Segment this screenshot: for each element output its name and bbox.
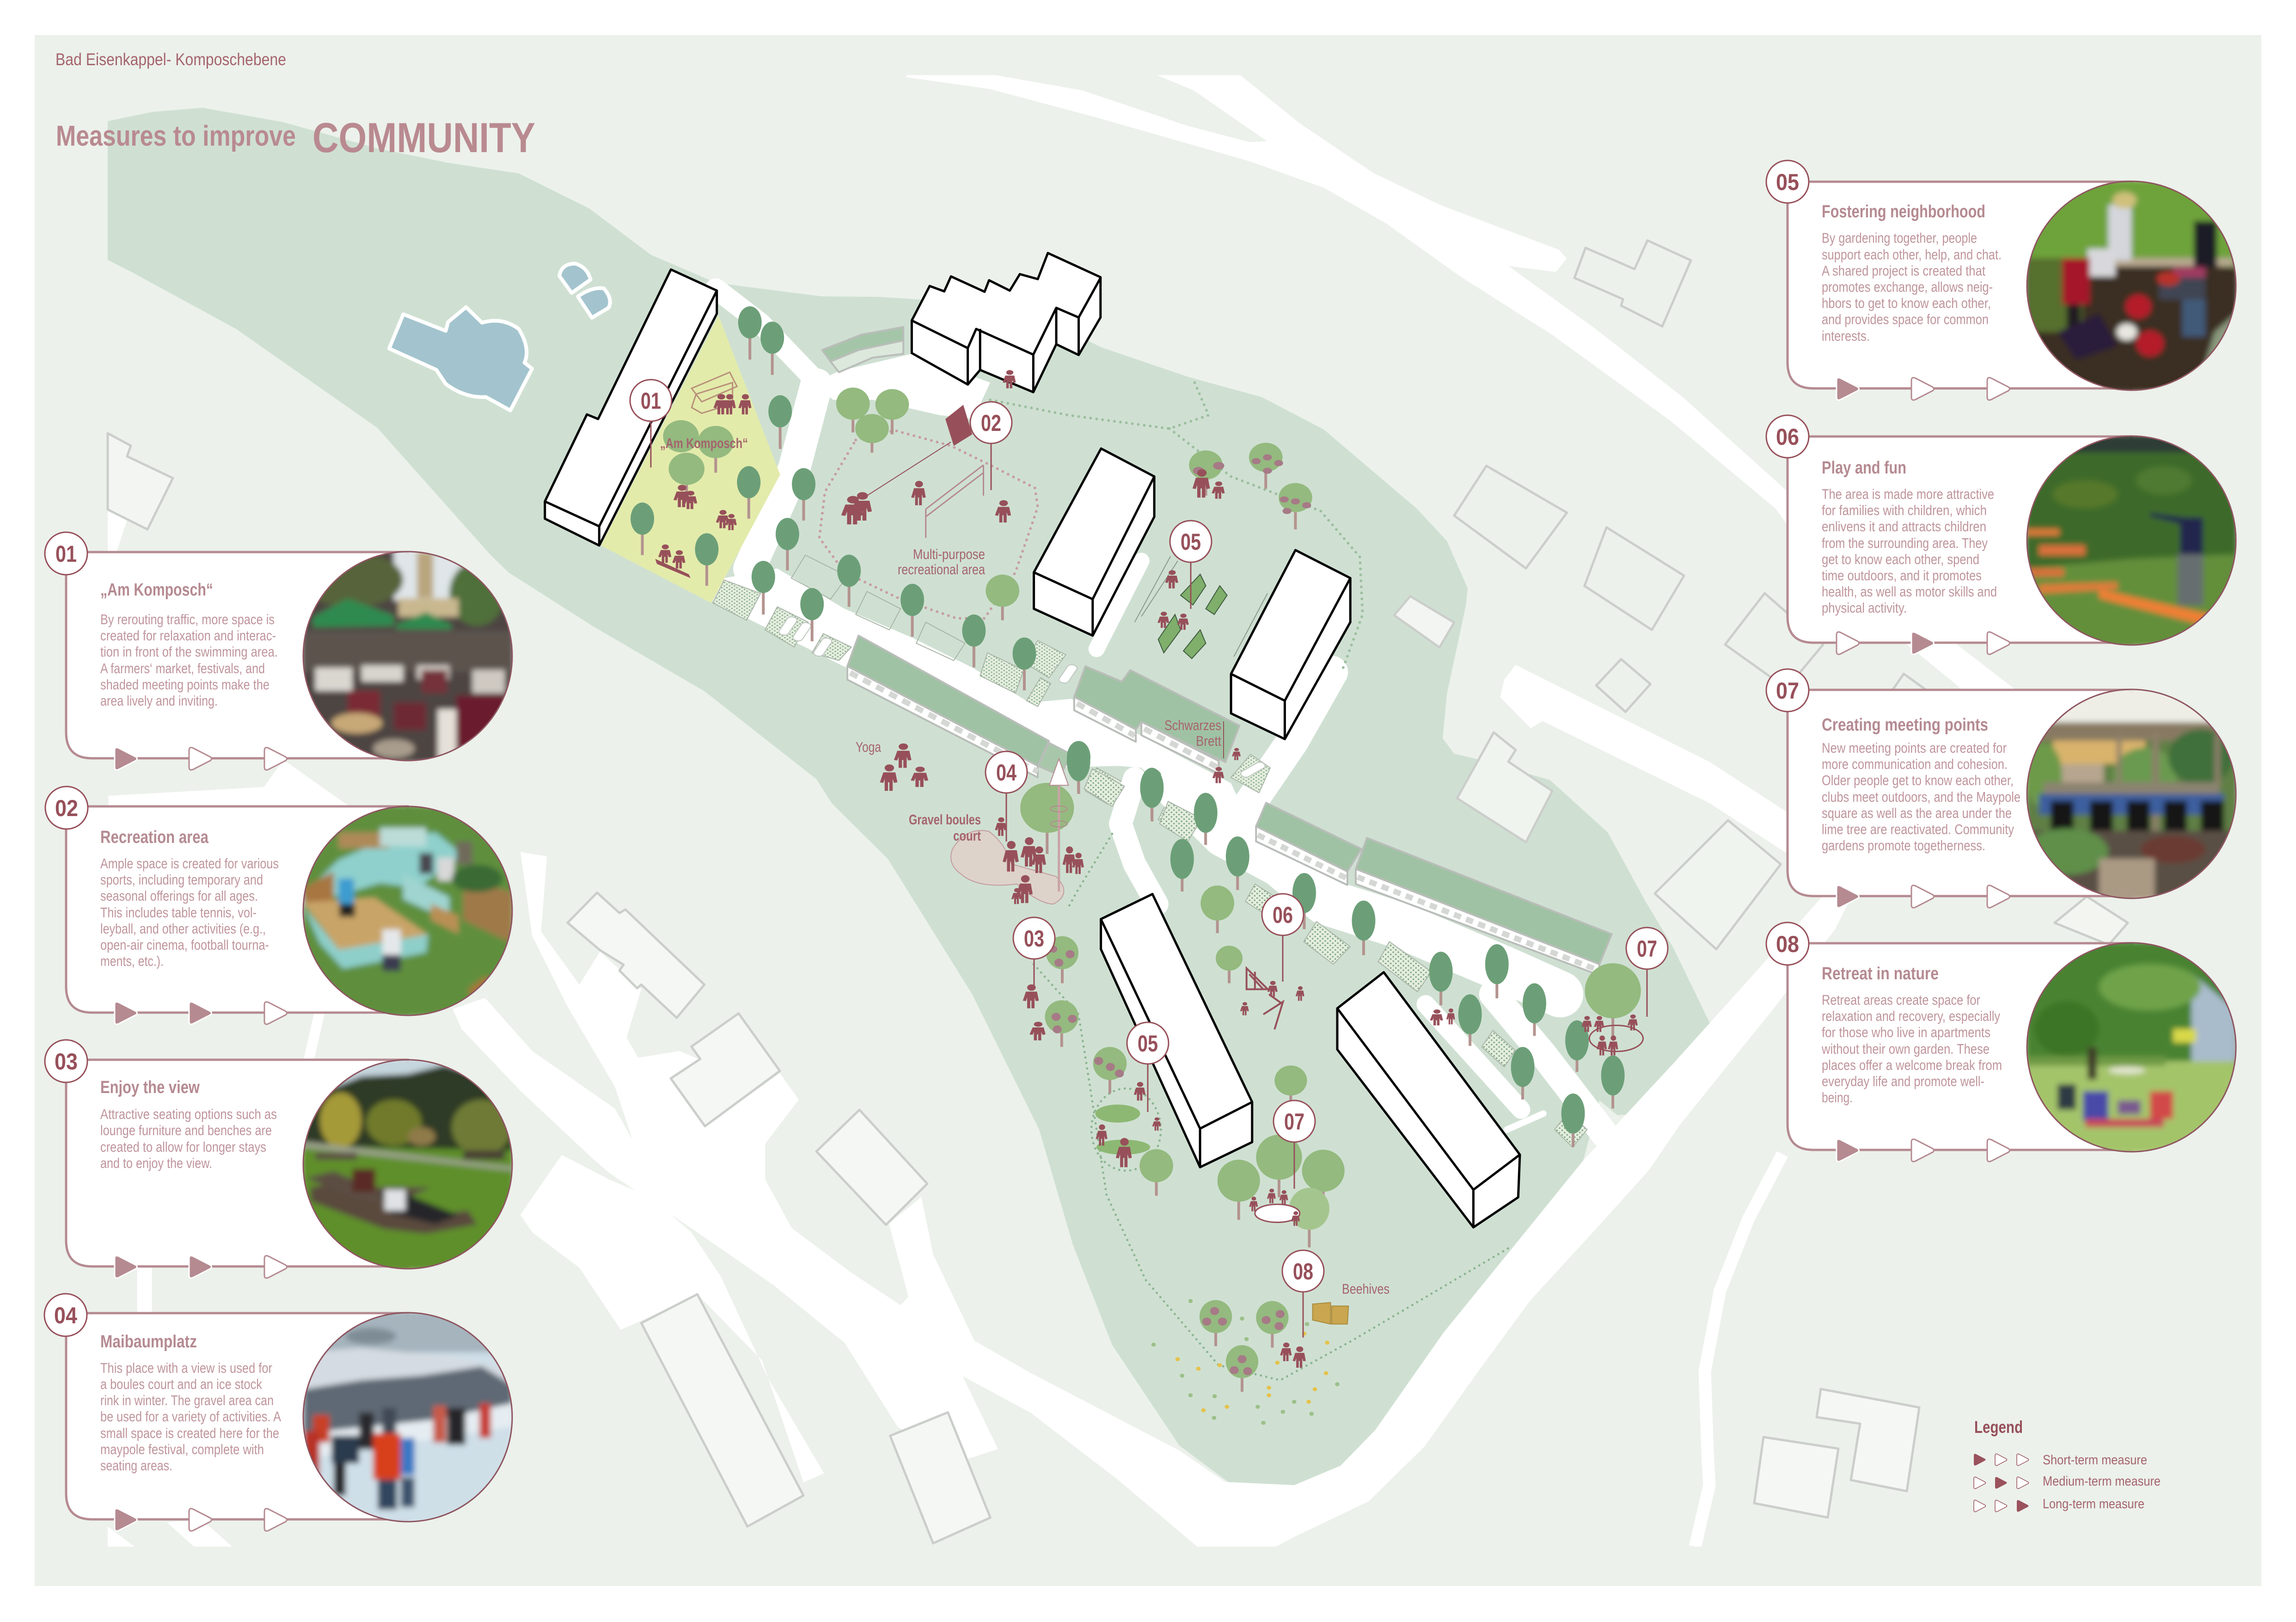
map pins xyxy=(630,380,1668,1338)
card text: This includes table tennis, vol- xyxy=(100,904,257,921)
parking spaces xyxy=(713,555,1270,832)
pin 02 xyxy=(970,402,1012,490)
card text xyxy=(100,611,278,709)
card text xyxy=(100,855,279,969)
pin 06: 06 xyxy=(1273,902,1293,928)
card title: Fostering neighborhood xyxy=(1822,202,1985,221)
north part of map xyxy=(545,253,1363,832)
map label: Schwarzes Brett: Brett xyxy=(1196,733,1221,749)
buildings north xyxy=(545,253,1350,739)
title: Measures to improve xyxy=(56,120,296,152)
map label: multi-purpose recreational area xyxy=(898,546,986,578)
number badge xyxy=(45,786,88,829)
panel: 08 Retreat in nature xyxy=(1766,922,2238,1161)
card text: promotes exchange, allows neig- xyxy=(1822,279,1993,295)
number badge: 06 xyxy=(1776,424,1799,450)
panel: 05 Fostering neighborhood xyxy=(1766,160,2238,400)
timeline triangles xyxy=(1837,378,2010,400)
footpaths south xyxy=(1034,834,1510,1380)
card text: everyday life and promote well- xyxy=(1822,1073,1984,1089)
card text: A farmers‘ market, festivals, and xyxy=(100,660,265,676)
map label: Beehives: Beehives xyxy=(1342,1281,1390,1297)
vegetable patch xyxy=(1095,1105,1150,1155)
photo: picnic under a tree xyxy=(2025,941,2238,1154)
card text: shaded meeting points make the xyxy=(100,676,269,693)
card text: sports, including temporary and xyxy=(100,872,263,888)
dark street trees north xyxy=(631,306,1312,822)
card text: relaxation and recovery, especially xyxy=(1822,1008,2000,1024)
pin 02: 02 xyxy=(981,410,1001,436)
photo: balancing on beams xyxy=(2025,434,2238,647)
card title: Recreation area xyxy=(100,828,209,847)
number badge: 08 xyxy=(1776,931,1799,957)
photo: dinner under a pergola xyxy=(2025,688,2238,900)
yellow market square xyxy=(601,315,780,603)
map label: multi-purpose recreational area: Multi-purpose xyxy=(913,546,985,562)
map label: Schwarzes Brett xyxy=(1164,717,1224,758)
number badge: 02 xyxy=(55,795,78,821)
card text: New meeting points are created for xyxy=(1822,740,2007,756)
timeline triangles xyxy=(1837,632,2010,654)
pin 08: 08 xyxy=(1293,1259,1313,1284)
surrounding roads xyxy=(108,75,2014,1548)
number badge xyxy=(1766,160,1809,203)
legend title: Legend xyxy=(1974,1418,2023,1437)
pin 05 south: 05 xyxy=(1138,1031,1158,1057)
card text: a boules court and an ice stock xyxy=(100,1376,262,1392)
location heading: Bad Eisenkappel- Komposchebene xyxy=(55,50,286,69)
number badge xyxy=(1766,669,1809,712)
card text: be used for a variety of activities. A xyxy=(100,1408,281,1425)
card text: hbors to get to know each other, xyxy=(1822,295,1991,311)
card text: Older people get to know each other, xyxy=(1822,772,2014,788)
card text xyxy=(1822,230,2002,344)
pin 01 xyxy=(630,380,672,467)
garage door rhythm xyxy=(850,673,1217,772)
panel: 02 Recreation area xyxy=(45,786,514,1024)
card text xyxy=(100,1106,277,1171)
people north xyxy=(655,370,1241,791)
buildings south xyxy=(1101,894,1520,1227)
pin 07 east xyxy=(1626,928,1668,1017)
card text: time outdoors, and it promotes xyxy=(1822,567,1982,584)
inner roads north xyxy=(713,289,1332,832)
legend xyxy=(1974,1418,2161,1512)
park green area xyxy=(108,108,1710,1496)
cars xyxy=(778,616,1267,779)
card title: „Am Komposch“ xyxy=(100,580,213,600)
photo: brass band festival xyxy=(301,550,514,762)
number badge xyxy=(44,1294,87,1336)
card text: seating areas. xyxy=(100,1457,172,1474)
card title: Creating meeting points xyxy=(1822,715,1988,735)
card title: Enjoy the view xyxy=(100,1078,200,1097)
card text: created to allow for longer stays xyxy=(100,1139,266,1155)
card text: health, as well as motor skills and xyxy=(1822,584,1997,600)
recreation equipment: kite and volleyball net xyxy=(867,405,984,538)
card text xyxy=(1822,486,1997,616)
card text: and to enjoy the view. xyxy=(100,1155,212,1171)
panel: 07 Creating meeting points xyxy=(1766,669,2238,908)
number badge xyxy=(1766,415,1809,458)
legend row: long-term: Long-term measure xyxy=(2043,1497,2144,1511)
number badge xyxy=(45,532,87,575)
card text: created for relaxation and interac- xyxy=(100,627,276,644)
card text: The area is made more attractive xyxy=(1822,486,1994,502)
legend row: long-term xyxy=(1974,1497,2144,1512)
pin 07 south xyxy=(1274,1100,1315,1189)
card text: lounge furniture and benches are xyxy=(100,1122,272,1138)
card text: more communication and cohesion. xyxy=(1822,756,2008,772)
panel: 06 Play and fun xyxy=(1766,415,2238,654)
playground equipment xyxy=(1247,968,1283,1029)
pin 03: 03 xyxy=(1024,926,1044,952)
map label: Yoga: Yoga xyxy=(856,739,882,755)
card text: area lively and inviting. xyxy=(100,693,218,709)
number badge: 04 xyxy=(54,1303,77,1328)
card text: Retreat areas create space for xyxy=(1822,992,1980,1008)
card text: from the surrounding area. They xyxy=(1822,535,1988,551)
pin 03 xyxy=(1013,917,1055,989)
card text: support each other, help, and chat. xyxy=(1822,246,2002,263)
swimming pond xyxy=(389,264,610,411)
number badge: 01 xyxy=(55,541,77,567)
card text xyxy=(1822,740,2020,854)
card text: Ample space is created for various xyxy=(100,855,279,872)
pin 05 north: 05 xyxy=(1181,529,1201,555)
market stall xyxy=(692,372,737,413)
legend row: short-term: Short-term measure xyxy=(2043,1453,2147,1468)
garage door rhythm south xyxy=(1258,835,1598,970)
title xyxy=(56,115,535,161)
map label: gravel boules court: Gravel boules xyxy=(909,811,981,828)
timeline triangles xyxy=(115,1509,287,1531)
card text: being. xyxy=(1822,1089,1853,1106)
garage rows north xyxy=(822,327,1239,777)
garden beds and drying racks xyxy=(1135,556,1267,658)
beehives xyxy=(1313,1303,1348,1324)
pin 07 east: 07 xyxy=(1637,936,1657,962)
round tables and benches xyxy=(1255,1026,1643,1223)
card text: get to know each other, spend xyxy=(1822,551,1979,567)
neighbouring houses xyxy=(108,240,2128,1543)
parking south xyxy=(1084,769,1587,1147)
map label: Am Komposch: „Am Komposch“ xyxy=(660,435,748,451)
card text: ments, etc.). xyxy=(100,953,164,969)
card text: without their own garden. These xyxy=(1821,1041,1990,1057)
card title: Play and fun xyxy=(1822,458,1906,478)
photo: loungers with a view xyxy=(301,1058,514,1271)
card text xyxy=(1821,992,2002,1106)
maypole xyxy=(1049,759,1068,891)
card text: By gardening together, people xyxy=(1822,230,1977,246)
card text: By rerouting traffic, more space is xyxy=(100,611,275,627)
card title: Maibaumplatz xyxy=(100,1332,197,1352)
card text: for those who live in apartments xyxy=(1822,1024,1990,1040)
card text: tion in front of the swimming area. xyxy=(100,644,278,660)
card text: for families with children, which xyxy=(1822,502,1987,518)
gravel boules court xyxy=(951,830,1064,904)
card text: small space is created here for the xyxy=(100,1425,279,1441)
panel: 01 Am Komposch xyxy=(45,532,514,770)
card text: A shared project is created that xyxy=(1822,263,1985,279)
pin 08 xyxy=(1282,1250,1324,1338)
pin 04: 04 xyxy=(996,760,1016,786)
photo: ice stock rink xyxy=(301,1311,514,1524)
title: COMMUNITY xyxy=(312,115,535,161)
number badge: 05 xyxy=(1776,169,1799,195)
pin 06 xyxy=(1262,894,1304,982)
number badge: 07 xyxy=(1776,678,1799,704)
timeline triangles xyxy=(1837,885,2010,908)
map label: gravel boules court xyxy=(909,811,981,844)
panel: 04 Maibaumplatz xyxy=(44,1294,514,1531)
timeline triangles xyxy=(115,1256,287,1278)
card text xyxy=(100,1360,281,1474)
legend row: medium-term xyxy=(1974,1474,2161,1489)
pin 04 xyxy=(986,751,1027,842)
legend row: medium-term: Medium-term measure xyxy=(2043,1474,2161,1489)
footpaths xyxy=(819,382,1363,668)
card text: enlivens it and attracts children xyxy=(1822,518,1986,535)
card title: Retreat in nature xyxy=(1822,964,1939,983)
number badge xyxy=(45,1040,87,1082)
card text: maypole festival, complete with xyxy=(100,1441,264,1457)
card text: and provides space for common xyxy=(1822,311,1989,327)
card text: places offer a welcome break from xyxy=(1822,1057,2002,1073)
timeline triangles xyxy=(115,1002,287,1024)
people south xyxy=(995,817,1638,1368)
trees south xyxy=(1020,741,1641,1392)
card text: lime tree are reactivated. Community xyxy=(1822,821,2014,837)
pin 05 north xyxy=(1170,521,1212,609)
site map xyxy=(108,75,2128,1548)
timeline triangles xyxy=(1837,1139,2010,1161)
card text: Attractive seating options such as xyxy=(100,1106,277,1122)
garage rows south xyxy=(1256,803,1612,975)
map label: Schwarzes Brett: Schwarzes xyxy=(1164,717,1221,733)
photo: community gardening xyxy=(2025,179,2238,392)
card text: rink in winter. The gravel area can xyxy=(100,1392,274,1408)
pin 01: 01 xyxy=(641,388,661,414)
card text: clubs meet outdoors, and the Maypole xyxy=(1822,789,2020,805)
card text: physical activity. xyxy=(1822,600,1907,616)
number badge: 03 xyxy=(55,1049,78,1075)
timeline triangles xyxy=(115,748,287,770)
map label: gravel boules court: court xyxy=(953,828,981,844)
inner roads south xyxy=(1120,779,1605,1135)
meadow flowers xyxy=(1151,1299,1340,1425)
number badge xyxy=(1766,922,1809,965)
card text: open-air cinema, football tourna- xyxy=(100,937,269,953)
panel: 03 Enjoy the view xyxy=(45,1040,514,1278)
card text: seasonal offerings for all ages. xyxy=(100,888,258,904)
pin 05 south xyxy=(1127,1022,1169,1112)
card text: gardens promote togetherness. xyxy=(1822,837,1985,854)
photo: table tennis xyxy=(301,805,514,1017)
legend row: short-term xyxy=(1974,1453,2147,1468)
south part of map xyxy=(951,741,1643,1425)
card text: interests. xyxy=(1822,328,1870,344)
card text: leyball, and other activities (e.g., xyxy=(100,921,266,937)
map label: multi-purpose recreational area: recreational area xyxy=(898,561,986,578)
card text: This place with a view is used for xyxy=(100,1360,272,1376)
pin 07 south: 07 xyxy=(1284,1109,1304,1135)
card text: square as well as the area under the xyxy=(1822,805,2012,821)
